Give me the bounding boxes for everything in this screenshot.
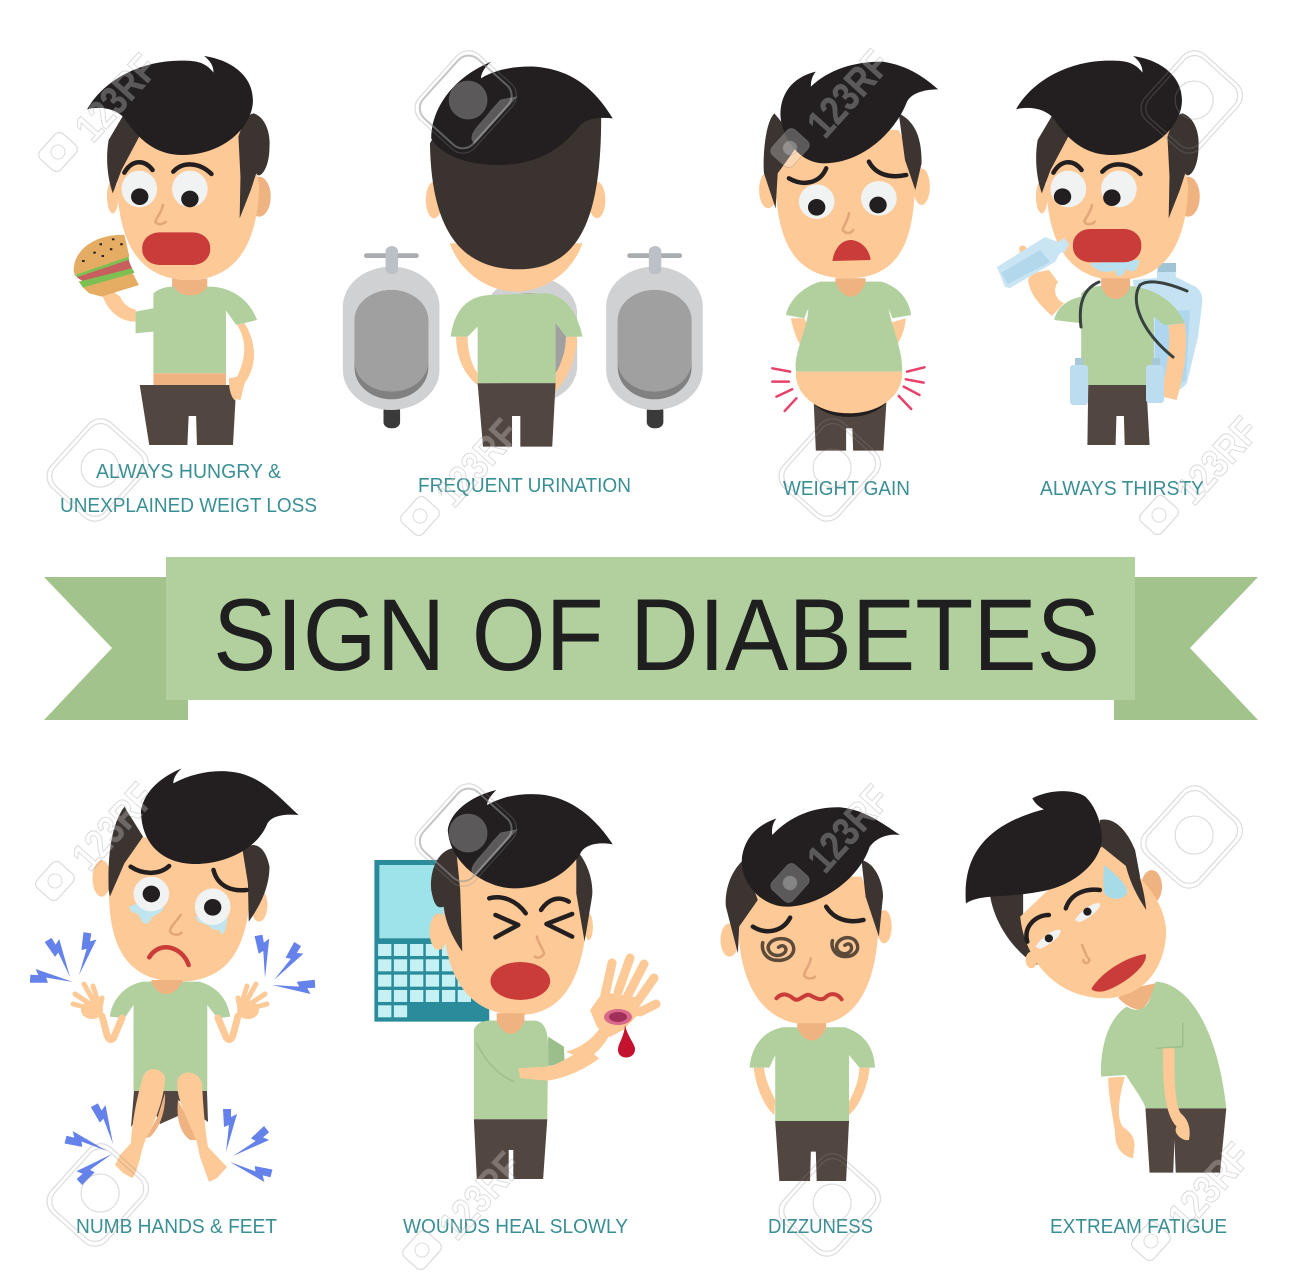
- strain marks: [772, 367, 924, 411]
- waist: [153, 373, 226, 385]
- nose: [1082, 945, 1089, 963]
- leg shading: [146, 1093, 197, 1140]
- face: [109, 837, 251, 982]
- label: weight gain: WEIGHT GAIN: [783, 478, 910, 500]
- shirt: [1054, 286, 1185, 385]
- sleeve line: [1157, 1023, 1183, 1048]
- icon: belt bottles: [1070, 358, 1164, 405]
- neck: [835, 278, 866, 299]
- label: always hungry: ALWAYS HUNGRY &: [96, 461, 282, 483]
- banner: [44, 557, 1258, 720]
- icon: water backpack: [1133, 263, 1202, 393]
- pants gap: [509, 1150, 513, 1179]
- pants: [478, 383, 556, 447]
- neck: [450, 243, 583, 292]
- watermark text marks: 123RF: [799, 777, 899, 881]
- shorts: [131, 1091, 208, 1127]
- blood drop: [618, 1025, 635, 1058]
- icon: burger: [74, 235, 139, 297]
- nose: [804, 958, 815, 978]
- banner body: [166, 557, 1135, 700]
- shirt: [110, 982, 230, 1092]
- icon: water bottle in hand: [997, 237, 1069, 288]
- side hair: [764, 113, 922, 208]
- ears: [720, 910, 892, 957]
- tears: [129, 900, 228, 935]
- side hair: [108, 807, 269, 922]
- neck: [172, 278, 207, 302]
- neck: [1101, 278, 1130, 300]
- right arm: [1162, 323, 1186, 400]
- eyes: [121, 171, 208, 207]
- mouth: [149, 947, 189, 965]
- figure: frequent urination: [343, 62, 703, 447]
- arms: [791, 318, 906, 348]
- figure: extreme fatigue: [966, 791, 1226, 1173]
- raised hand: [580, 958, 656, 1052]
- ears: [430, 913, 593, 950]
- mouth: [1073, 229, 1141, 262]
- neck: [1118, 983, 1156, 1010]
- drinking tube: [1080, 282, 1187, 357]
- hair: [448, 790, 613, 888]
- side hair: [726, 860, 883, 953]
- raised forearm: [566, 1022, 614, 1060]
- icon: calendar: [374, 860, 489, 1022]
- shirt crease: [477, 1043, 514, 1082]
- figure: always hungry: [74, 56, 271, 445]
- labels: top row: [60, 461, 1204, 517]
- label: extreme fatigue: EXTREAM FATIGUE: [1050, 1216, 1227, 1238]
- legs and feet: [115, 1069, 227, 1182]
- side hair: [107, 113, 270, 218]
- ears: [759, 168, 930, 208]
- tired eyes: [1036, 903, 1100, 949]
- nose: [170, 915, 182, 935]
- banner tails: [44, 577, 1258, 720]
- wavy mouth: [776, 994, 842, 1000]
- nose: [155, 205, 166, 224]
- right hanging arm: [1163, 1048, 1190, 1140]
- face: [738, 877, 879, 1025]
- labels: bottom row: [76, 1216, 1227, 1238]
- back hair: [990, 819, 1146, 965]
- figure: always thirsty: [997, 56, 1202, 445]
- arm holding burger: [81, 278, 136, 322]
- watermark small logos: [33, 126, 1181, 1272]
- hair: [742, 807, 900, 907]
- pants: [1145, 1108, 1226, 1173]
- shirt: [750, 1027, 875, 1121]
- hands: [73, 984, 267, 1019]
- face: [117, 130, 259, 280]
- hair: [780, 62, 938, 163]
- sweat drop: [1103, 865, 1127, 899]
- belly: [796, 372, 902, 413]
- watermark text marks: 123RF: [428, 411, 528, 515]
- hair: [87, 56, 253, 155]
- watermark text marks: 123RF: [67, 46, 167, 150]
- mouth: [490, 962, 550, 1000]
- left hanging arm: [1108, 1077, 1134, 1158]
- face: [776, 130, 915, 278]
- shirt: [136, 287, 257, 373]
- watermark text marks: 123RF: [431, 1144, 531, 1248]
- head: [1016, 56, 1200, 280]
- ears: [92, 860, 267, 922]
- eyes: [134, 877, 231, 925]
- watermark text marks: 123RF: [1160, 1135, 1260, 1239]
- wound: [604, 1009, 632, 1025]
- arms: [456, 337, 577, 392]
- face: [443, 850, 589, 1015]
- pants: [140, 385, 236, 445]
- label: frequent urination: FREQUENT URINATION: [418, 475, 631, 497]
- label: unexplained weight loss: UNEXPLAINED WEIGT LOSS: [60, 495, 317, 517]
- figure: weight gain: [759, 62, 938, 451]
- spiral eyes: [762, 938, 858, 960]
- figure: wounds heal slowly: [374, 790, 656, 1179]
- hair: [141, 768, 299, 864]
- figure: numb hands and feet: [30, 768, 316, 1185]
- mouth: [142, 232, 210, 265]
- neck: [797, 1023, 826, 1042]
- side hair: [431, 848, 592, 952]
- label: numb hands and feet: NUMB HANDS & FEET: [76, 1216, 277, 1238]
- hand on waist: [229, 377, 240, 401]
- neck: [151, 980, 182, 995]
- shirt: [1101, 982, 1226, 1108]
- label: dizziness: DIZZUNESS: [768, 1216, 873, 1238]
- right hair strand: [1123, 850, 1146, 910]
- eyebrows: [124, 162, 211, 174]
- label: always thirsty: ALWAYS THIRSTY: [1040, 478, 1204, 500]
- figure: dizziness: [720, 807, 900, 1181]
- shirt: [451, 293, 583, 383]
- eyebrows: [131, 866, 247, 890]
- hair: [966, 791, 1102, 903]
- neck: [497, 1013, 524, 1036]
- arms: [754, 1068, 870, 1115]
- watermark text marks: 123RF: [64, 775, 164, 879]
- ears: [107, 177, 271, 217]
- eyes: [799, 181, 897, 219]
- pants: [775, 1121, 849, 1181]
- shirt: [786, 282, 911, 372]
- squeezed eyes: [489, 897, 572, 937]
- eyebrows: [789, 162, 906, 183]
- hair: [431, 62, 613, 165]
- right arm: [229, 323, 254, 400]
- eyebrows: [753, 907, 864, 931]
- watermark text marks: 123RF: [799, 42, 899, 146]
- mouth: [1092, 954, 1146, 992]
- face: [1020, 847, 1166, 998]
- supporting arm: [518, 1048, 599, 1081]
- pants: [474, 1119, 547, 1179]
- water drips: [1089, 260, 1139, 276]
- ears: [426, 182, 605, 218]
- icon: centre urinal: [485, 277, 577, 403]
- icon: right urinal: [606, 246, 703, 428]
- shirt: [474, 1021, 548, 1119]
- label: wounds heal slowly: WOUNDS HEAL SLOWLY: [403, 1216, 628, 1238]
- arms: [102, 1016, 238, 1040]
- mouth: [832, 240, 871, 261]
- icon: left urinal: [343, 246, 439, 428]
- nose: [843, 213, 853, 233]
- icons: numbness bolts: [30, 932, 316, 1185]
- pants: [1087, 385, 1150, 445]
- eyebrows: [1026, 890, 1100, 942]
- belly shadow: [814, 397, 886, 417]
- title: SIGN OF DIABETES: [213, 578, 1100, 692]
- arm holding bottle: [1028, 270, 1064, 316]
- sleeve: [548, 1037, 565, 1066]
- ears: [1026, 870, 1162, 968]
- back of head: [430, 80, 601, 269]
- nose: [535, 937, 544, 958]
- pants: [814, 403, 886, 451]
- watermark text marks: 123RF: [1168, 409, 1268, 513]
